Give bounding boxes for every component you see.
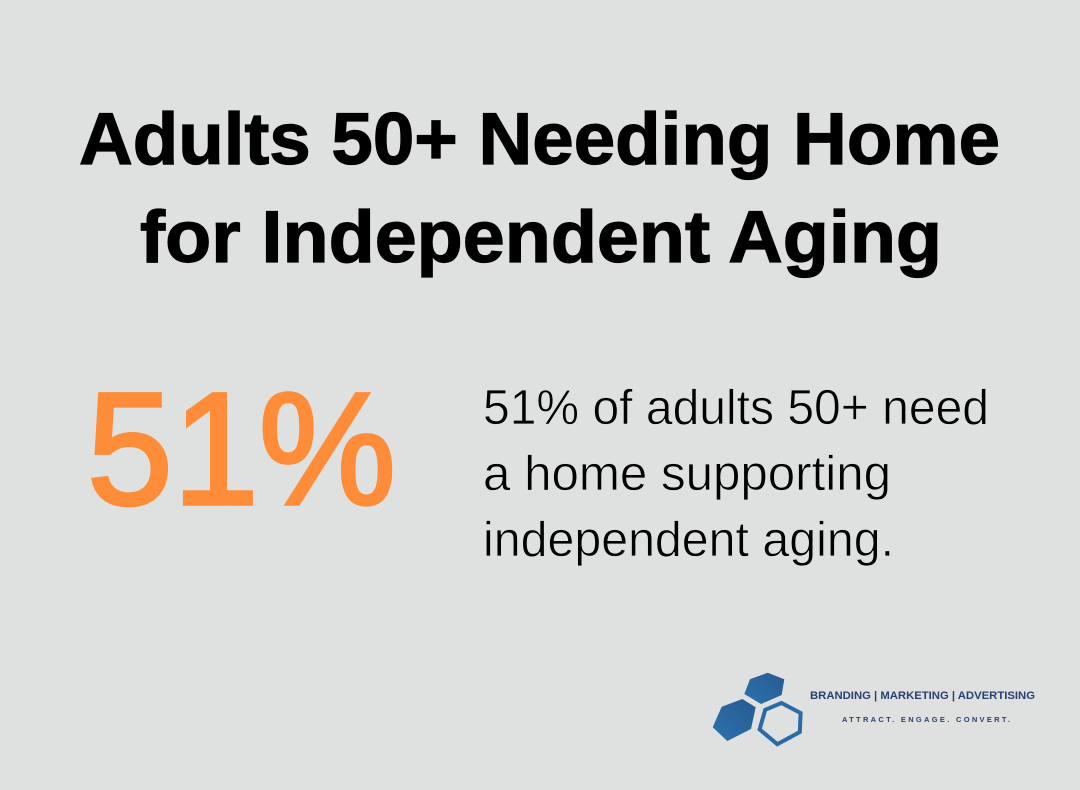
tagline: ATTRACT. ENGAGE. CONVERT. — [842, 715, 1010, 724]
title: for Independent Aging — [140, 197, 942, 278]
icon: hexagon logo — [713, 673, 801, 744]
description text — [483, 381, 989, 567]
logo and brand tagline — [713, 673, 1035, 744]
description text: a home supporting — [483, 447, 891, 501]
title: Adults 50+ Needing Home — [79, 99, 1000, 180]
brand line: BRANDING | MARKETING | ADVERTISING — [810, 690, 1035, 702]
big statistic: 51%: 51% — [87, 359, 396, 538]
description text: 51% of adults 50+ need — [483, 381, 989, 435]
title — [79, 99, 1000, 278]
description text: independent aging. — [483, 513, 894, 567]
